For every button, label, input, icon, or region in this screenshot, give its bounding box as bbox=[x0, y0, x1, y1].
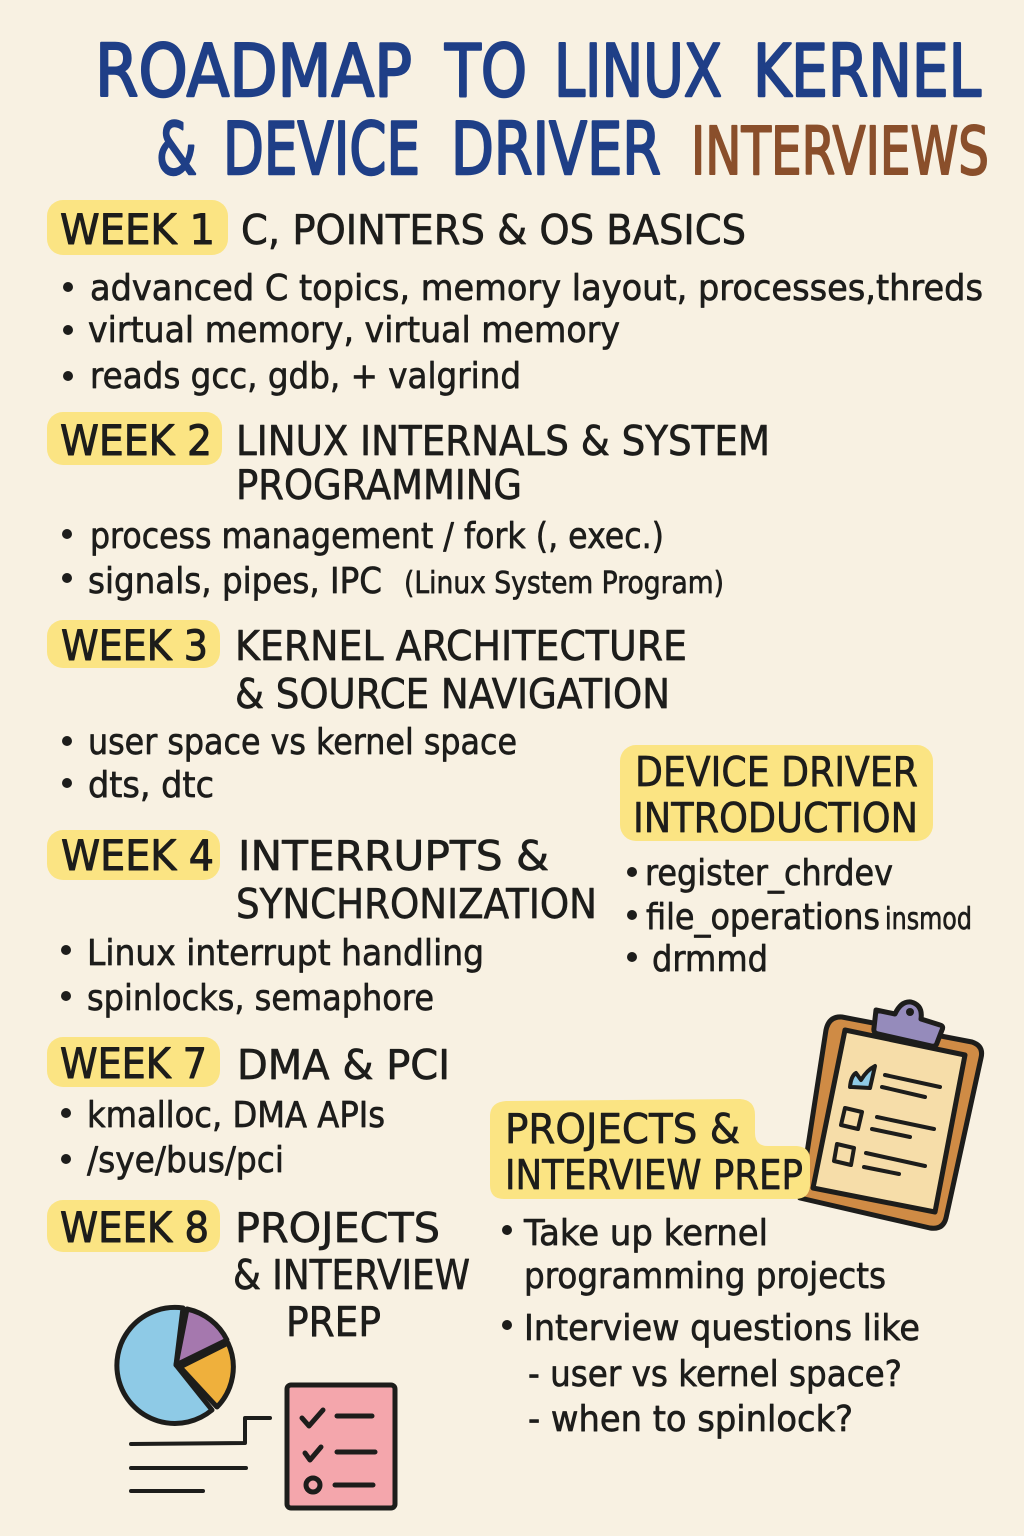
panel: week 8: PREP bbox=[286, 1298, 381, 1346]
panel: device driver introduction: register_chrdev bbox=[645, 853, 893, 894]
title bbox=[95, 29, 989, 191]
panel: week 1: reads gcc, gdb, + valgrind bbox=[90, 356, 521, 397]
title: DEVICE bbox=[223, 107, 420, 191]
panel: week 2: WEEK 2 bbox=[60, 416, 212, 465]
panel: week 3: WEEK 3 bbox=[61, 621, 208, 670]
title: TO bbox=[444, 29, 527, 113]
panel: week 8 bbox=[47, 1200, 470, 1346]
panel: week 7 bbox=[47, 1037, 450, 1181]
panel: projects and interview prep: - user vs kernel space? bbox=[528, 1354, 902, 1395]
panel: week 1: advanced C topics, memory layout, processes,threds bbox=[90, 268, 983, 309]
panel: week 1: WEEK 1 bbox=[60, 205, 215, 254]
panel: week 4 bbox=[47, 830, 597, 1019]
panel: week 4: SYNCHRONIZATION bbox=[236, 880, 597, 928]
panel: week 8: & INTERVIEW bbox=[233, 1251, 470, 1299]
panel: projects and interview prep: INTERVIEW PREP bbox=[505, 1151, 803, 1199]
panel: projects and interview prep: Interview questions like bbox=[524, 1308, 920, 1349]
panel: projects and interview prep: PROJECTS & bbox=[505, 1105, 740, 1153]
title: DRIVER bbox=[451, 107, 661, 191]
panel: week 8: WEEK 8 bbox=[60, 1203, 209, 1252]
title: LINUX bbox=[554, 29, 722, 113]
panel: week 1: virtual memory, virtual memory bbox=[88, 310, 620, 351]
panel: device driver introduction: INTRODUCTION bbox=[633, 794, 918, 842]
panel: week 2: signals, pipes, IPC bbox=[88, 561, 382, 602]
panel: projects and interview prep: - when to spinlock? bbox=[528, 1399, 853, 1440]
panel: week 2 bbox=[47, 412, 770, 602]
panel: week 7: /sye/bus/pci bbox=[87, 1140, 284, 1181]
panel: week 2: PROGRAMMING bbox=[236, 461, 522, 509]
icon: clipboard bbox=[800, 1002, 982, 1228]
panel: week 3: & SOURCE NAVIGATION bbox=[235, 670, 670, 718]
panel: device driver introduction bbox=[620, 745, 972, 980]
panel: week 3: dts, dtc bbox=[88, 765, 214, 806]
panel: week 4: INTERRUPTS & bbox=[238, 832, 549, 880]
title: & bbox=[156, 107, 197, 191]
panel: week 8: PROJECTS bbox=[235, 1204, 440, 1252]
panel: week 2: (Linux System Program) bbox=[404, 566, 724, 601]
panel: projects and interview prep: programming projects bbox=[524, 1256, 886, 1297]
panel: week 2: LINUX INTERNALS & SYSTEM bbox=[236, 417, 770, 465]
title: ROADMAP bbox=[95, 29, 412, 113]
panel: week 3: user space vs kernel space bbox=[88, 722, 517, 763]
panel: week 1 bbox=[47, 200, 983, 397]
panel: device driver introduction: DEVICE DRIVER bbox=[635, 748, 918, 796]
icon: pie chart bbox=[117, 1307, 233, 1423]
panel: device driver introduction: file_operations bbox=[646, 897, 880, 938]
panel: week 4: Linux interrupt handling bbox=[87, 933, 484, 974]
icon: checklist card bbox=[287, 1385, 395, 1508]
panel: week 3 bbox=[47, 620, 687, 806]
panel: week 1: C, POINTERS & OS BASICS bbox=[241, 206, 746, 254]
panel: projects and interview prep bbox=[490, 1099, 920, 1440]
panel: device driver introduction: drmmd bbox=[652, 939, 768, 980]
panel: week 4: WEEK 4 bbox=[61, 831, 214, 880]
panel: week 3: KERNEL ARCHITECTURE bbox=[235, 622, 687, 670]
panel: projects and interview prep: Take up kernel bbox=[523, 1213, 768, 1254]
panel: week 7: DMA & PCI bbox=[237, 1041, 450, 1089]
panel: device driver introduction: insmod bbox=[885, 902, 972, 937]
panel: week 2: process management / fork (, exec.) bbox=[90, 516, 664, 557]
panel: week 7: kmalloc, DMA APIs bbox=[87, 1095, 385, 1136]
panel: week 4: spinlocks, semaphore bbox=[87, 978, 434, 1019]
icon: stepped lines bbox=[131, 1418, 270, 1491]
panel: week 7: WEEK 7 bbox=[60, 1039, 207, 1088]
